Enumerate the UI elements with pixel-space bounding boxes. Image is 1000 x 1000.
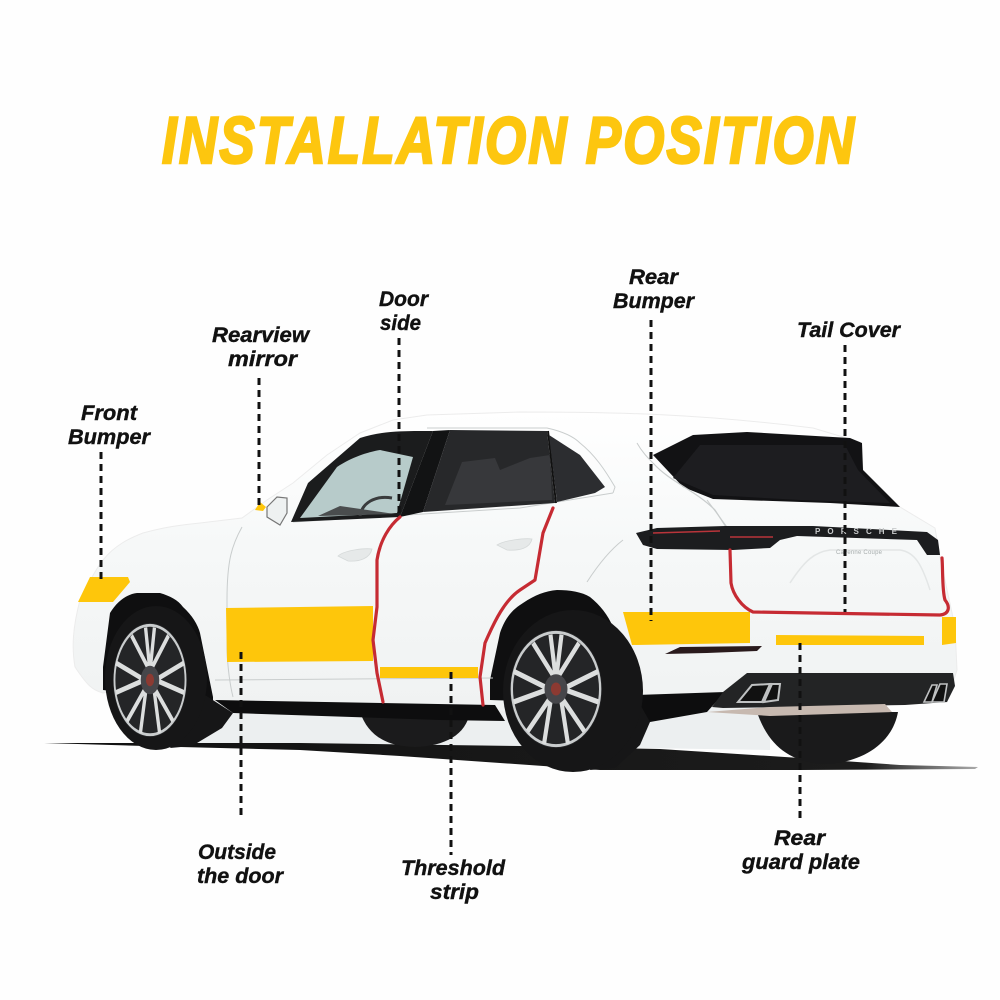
rear window [653, 432, 900, 507]
door window [291, 431, 433, 522]
label: outside the door: the door [197, 864, 285, 888]
tail light bar [636, 526, 940, 555]
sill [215, 700, 505, 721]
label: threshold strip: Threshold [401, 856, 506, 880]
front tyre tread [170, 695, 233, 748]
label: front bumper [68, 401, 152, 449]
side mirror [267, 497, 287, 525]
car illustration [44, 412, 978, 772]
label: rearview mirror: mirror [228, 347, 299, 371]
leader: outside the door [240, 652, 242, 820]
rear pillar line [653, 463, 728, 530]
rear door window [423, 430, 555, 512]
leader: threshold strip [450, 672, 452, 855]
front wheel arch [103, 593, 213, 702]
red seal: tailgate [730, 550, 948, 615]
body seams [215, 428, 930, 697]
red seal: door [373, 517, 400, 702]
label: door side: side [380, 311, 421, 335]
yellow: outside the door [226, 606, 373, 662]
quarter window [549, 435, 605, 502]
tail light red [653, 531, 773, 537]
rear lower trim [636, 692, 725, 722]
rear reflector [665, 646, 762, 654]
label: threshold strip: strip [430, 880, 479, 904]
yellow: mirror base [255, 502, 266, 511]
label: outside the door [197, 840, 285, 888]
exhaust right [924, 684, 947, 702]
rear wheel [503, 610, 643, 772]
exhaust left [738, 684, 780, 702]
rear wheel arch [490, 590, 637, 705]
label: threshold strip [401, 856, 506, 904]
brand lettering: PORSCHE [815, 527, 898, 536]
door divider [548, 431, 556, 503]
label: outside the door: Outside [198, 840, 276, 864]
yellow: front bumper [78, 577, 130, 602]
leader: rear bumper [650, 320, 652, 621]
model badge: Cayenne Coupe [836, 550, 883, 556]
lower guard [707, 704, 892, 716]
title: INSTALLATION POSITION [162, 103, 856, 177]
label: door side [379, 287, 430, 335]
red seal: rear door arch [480, 508, 553, 705]
far wheels [360, 712, 470, 747]
front wheel [105, 606, 207, 750]
diffuser [712, 673, 955, 708]
label: rearview mirror [212, 323, 310, 371]
yellow: rear bumper [623, 612, 750, 645]
yellow: rear guard plate [776, 635, 924, 645]
leader: front bumper [100, 452, 102, 582]
leader: tail cover [844, 345, 846, 612]
label: door side: Door [379, 287, 430, 311]
body [73, 412, 957, 712]
rear tyre tread [590, 690, 650, 770]
label: rear bumper: Rear [629, 265, 680, 289]
leader: door side [398, 338, 400, 518]
door pillar [400, 430, 450, 517]
label: rear bumper: Bumper [613, 289, 696, 313]
ground shadow [44, 743, 978, 770]
label: rear guard plate: guard plate [741, 850, 860, 874]
label: front bumper: Bumper [68, 425, 152, 449]
door handles [338, 539, 532, 561]
label: rearview mirror: Rearview [212, 323, 310, 347]
underbody area [190, 700, 770, 750]
leader: rearview mirror [258, 378, 260, 505]
label: front bumper: Front [81, 401, 138, 425]
label: tail cover: Tail Cover [797, 318, 902, 342]
label: rear bumper [613, 265, 696, 313]
label: rear guard plate: Rear [774, 826, 827, 850]
leader: rear guard plate [798, 643, 802, 820]
yellow: bumper corner [942, 617, 956, 645]
label: rear guard plate [741, 826, 860, 874]
yellow: threshold strip [380, 667, 478, 678]
